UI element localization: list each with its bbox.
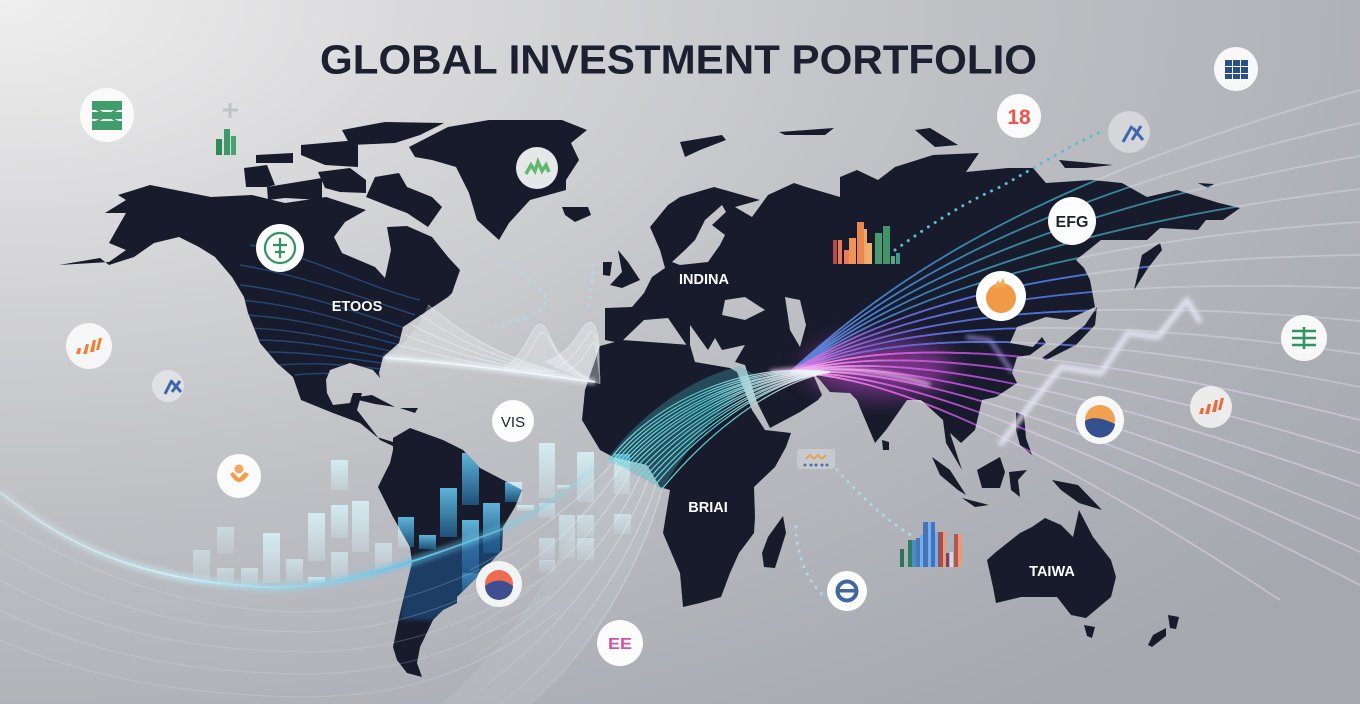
dotted connector lines	[481, 130, 1105, 597]
South America	[378, 428, 522, 677]
Greenland	[409, 120, 587, 240]
icon: red and blue disc, South America	[476, 561, 522, 607]
icon: EFG badge: EFG	[1056, 214, 1088, 231]
icon: orange bars left	[66, 323, 112, 369]
North America blue data lines	[240, 245, 420, 376]
Madagascar	[762, 516, 786, 568]
icon: green seal	[256, 224, 304, 272]
icon: blue grid	[1214, 47, 1258, 91]
islands	[244, 122, 1214, 647]
bar chart: blue, green and red over Indian Ocean	[900, 522, 962, 567]
trend line	[966, 300, 1200, 445]
Eurasia	[605, 153, 1240, 470]
blue bars clipped to South America	[398, 453, 630, 596]
Africa teal wave band	[608, 366, 830, 489]
label: INDINA: INDINA	[679, 272, 729, 288]
pale bar chart over South America	[193, 443, 631, 585]
icon: blue glyph left	[152, 370, 184, 402]
label: TAIWA: TAIWA	[1029, 564, 1075, 580]
diagonal pale band to the south Atlantic	[440, 462, 662, 704]
map labels	[332, 272, 1075, 580]
icon: red 18 badge	[997, 94, 1041, 138]
Australia	[987, 510, 1116, 618]
Asia data fan	[770, 90, 1360, 600]
blue glow on South America	[400, 525, 510, 620]
icon: pink EE badge	[597, 620, 643, 666]
icon: orange flame	[976, 271, 1026, 321]
icon: small legend chip	[797, 449, 835, 469]
Atlantic white wave band	[385, 305, 600, 384]
icon: blue gear	[827, 571, 867, 611]
icon: pink EE badge: EE	[608, 636, 632, 653]
icon: VIS badge: VIS	[501, 414, 525, 431]
icon: green zigzag	[516, 147, 558, 189]
label: BRIAI: BRIAI	[688, 500, 728, 516]
North America	[59, 185, 460, 447]
icon: plus and green bars	[216, 103, 238, 155]
world map	[59, 120, 1240, 677]
label: ETOOS: ETOOS	[332, 299, 383, 315]
icon: green rows	[1281, 315, 1327, 361]
bar chart: orange and green over Russia	[833, 222, 900, 264]
icon: blue glyph right	[1108, 111, 1150, 153]
title: GLOBAL INVESTMENT PORTFOLIO	[320, 36, 1037, 82]
icon: green emblem	[80, 88, 134, 142]
icon: orange and blue disc	[1076, 396, 1124, 444]
icon: orange bars right	[1190, 386, 1232, 428]
icon: red 18 badge: 18	[1007, 106, 1031, 129]
icon: orange hands	[217, 454, 261, 498]
Africa	[582, 340, 791, 607]
icon: VIS badge	[492, 400, 534, 442]
icon: EFG badge	[1048, 197, 1096, 245]
lower-left glowing curve	[0, 462, 600, 697]
pink glow over Asia	[805, 340, 955, 396]
